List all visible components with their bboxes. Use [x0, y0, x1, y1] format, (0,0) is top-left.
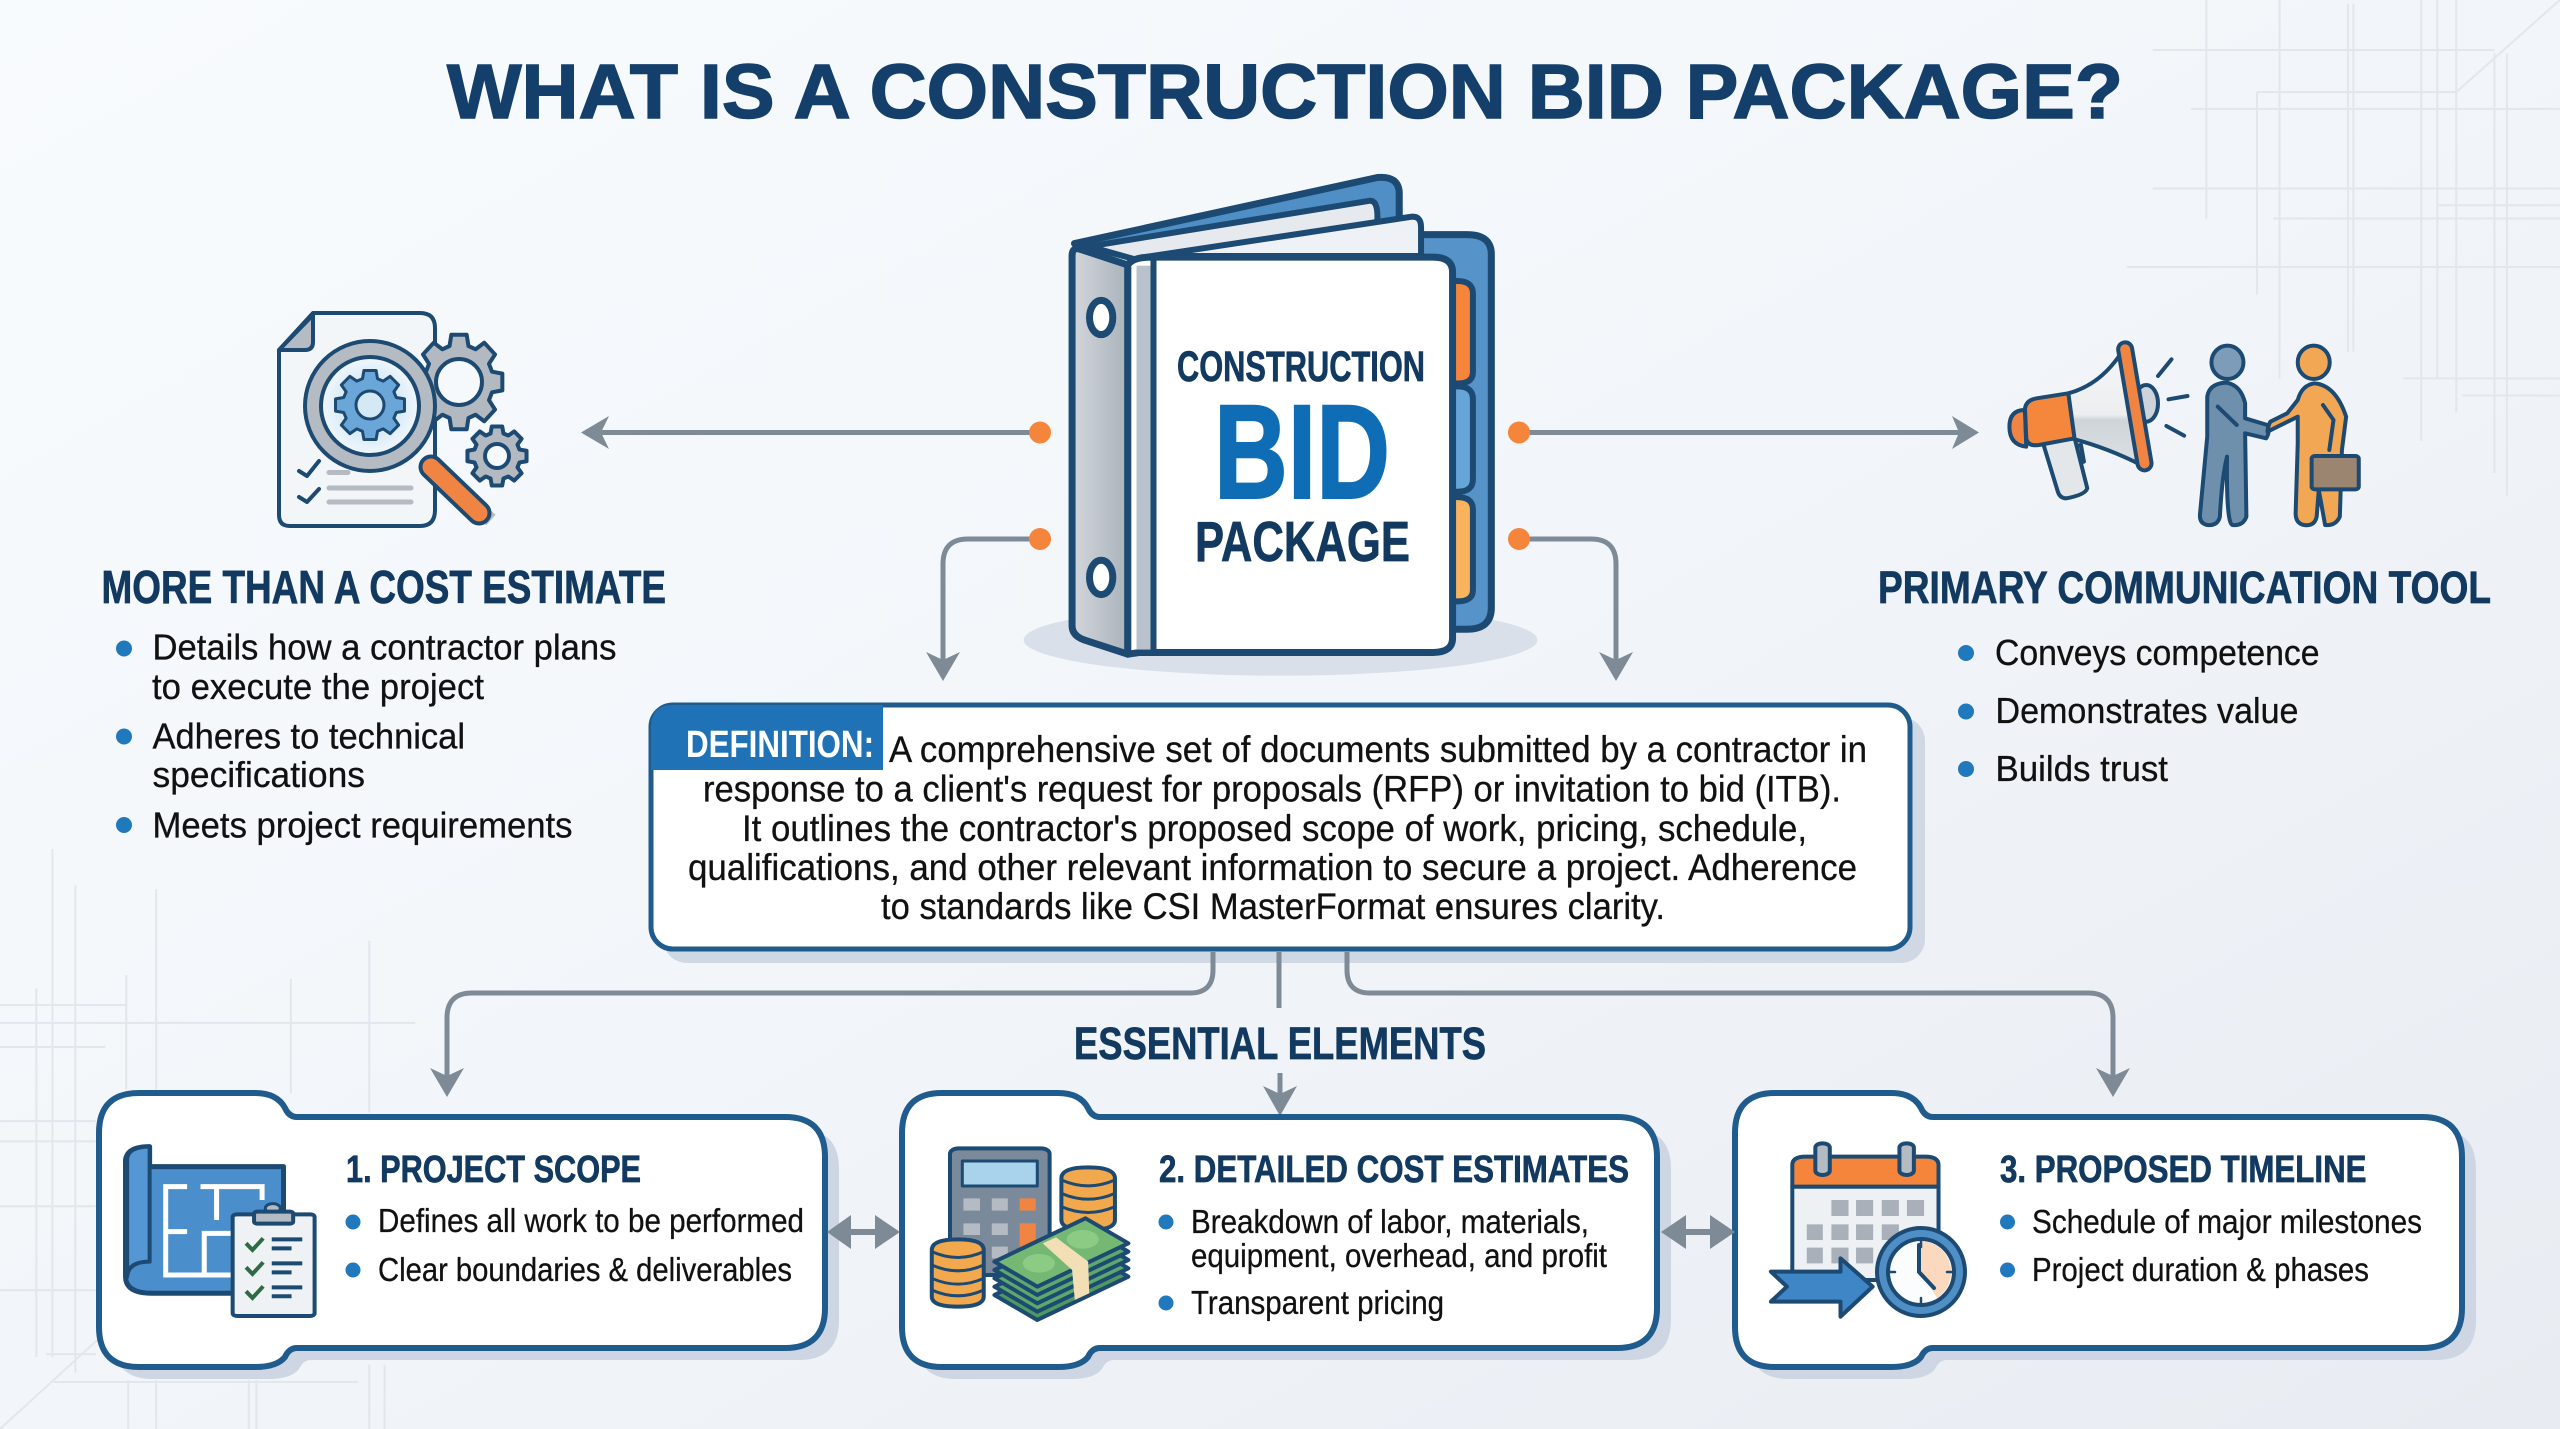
- card title: 2. DETAILED COST ESTIMATES: [1159, 1149, 1629, 1191]
- title: WHAT IS A CONSTRUCTION BID PACKAGE?: [447, 49, 2123, 135]
- bullet list: cost estimate: specifications: [152, 754, 365, 795]
- arrow: scope to cost estimates: [827, 1215, 900, 1249]
- arrow: definition to essential elements: [1276, 952, 1282, 1008]
- arrow: definition to proposed timeline: [1347, 952, 2130, 1097]
- card bullets: Breakdown of labor, materials,: [1191, 1203, 1589, 1240]
- bullet list: cost estimate: Adheres to technical: [152, 716, 465, 756]
- bullet list: cost estimate: Details how a contractor plans: [152, 626, 616, 668]
- bullet list: communication tool: Demonstrates value: [1996, 690, 2298, 731]
- panel: proposed timeline: [1735, 1093, 2476, 1379]
- arrow: binder to cost estimate: [581, 416, 1051, 449]
- card bullets: Transparent pricing: [1191, 1284, 1444, 1321]
- card bullets: equipment, overhead, and profit: [1191, 1237, 1607, 1274]
- card bullets: Clear boundaries & deliverables: [378, 1251, 792, 1288]
- card bullets: Schedule of major milestones: [2032, 1203, 2422, 1240]
- bullet list: cost estimate: Meets project requirements: [152, 804, 572, 846]
- binder cover text: PACKAGE: [1195, 510, 1410, 574]
- definition text: qualifications, and other relevant information to secure a project. Adherence: [688, 847, 1857, 888]
- arrow: binder to communication tool: [1508, 416, 1979, 449]
- definition label: DEFINITION:: [686, 724, 874, 766]
- card bullets: [2000, 1203, 2422, 1288]
- binder cover text: CONSTRUCTION: [1177, 343, 1425, 391]
- icon: binder: [1024, 177, 1537, 676]
- definition text: It outlines the contractor's proposed scope of work, pricing, schedule,: [742, 808, 1807, 849]
- arrow: definition to project scope: [430, 952, 1213, 1097]
- panel: detailed cost estimates: [902, 1093, 1671, 1379]
- icon: blueprint and checklist: [126, 1147, 315, 1316]
- card bullets: Defines all work to be performed: [378, 1202, 804, 1239]
- card bullets: [1158, 1203, 1607, 1321]
- binder cover text: [1177, 343, 1425, 574]
- definition text: [688, 729, 1867, 927]
- definition text: to standards like CSI MasterFormat ensures clarity.: [881, 886, 1665, 927]
- arrow: cost estimates to timeline: [1661, 1215, 1735, 1249]
- heading: more than a cost estimate: MORE THAN A COST ESTIMATE: [102, 561, 666, 613]
- icon: calculator, coins and cash: [932, 1148, 1128, 1320]
- arrow: binder to definition left: [926, 528, 1051, 681]
- definition text: A comprehensive set of documents submitted by a contractor in: [889, 729, 1867, 770]
- panel: definition: [651, 705, 1925, 963]
- card bullets: [346, 1202, 804, 1288]
- heading: essential elements: ESSENTIAL ELEMENTS: [1074, 1018, 1486, 1069]
- bullet list: communication tool: Conveys competence: [1995, 632, 2320, 673]
- arrow: binder to definition right: [1508, 528, 1633, 681]
- icon: document inspection with gears: [279, 313, 527, 526]
- bullet list: communication tool: [1958, 632, 2320, 789]
- arrow: essential elements to cost estimates: [1263, 1073, 1297, 1116]
- panel: project scope: [99, 1093, 839, 1379]
- definition text: response to a client's request for proposals (RFP) or invitation to bid (ITB).: [703, 768, 1841, 810]
- binder cover text: BID: [1214, 378, 1390, 527]
- bullet list: cost estimate: to execute the project: [152, 666, 484, 707]
- bullet list: communication tool: Builds trust: [1996, 748, 2168, 789]
- card bullets: Project duration & phases: [2032, 1251, 2369, 1288]
- card title: 3. PROPOSED TIMELINE: [2000, 1149, 2366, 1191]
- bullet list: cost estimate: [116, 626, 616, 846]
- card title: 1. PROJECT SCOPE: [346, 1149, 641, 1191]
- icon: calendar and clock: [1771, 1143, 1965, 1317]
- icon: megaphone and handshake: [2009, 346, 2359, 525]
